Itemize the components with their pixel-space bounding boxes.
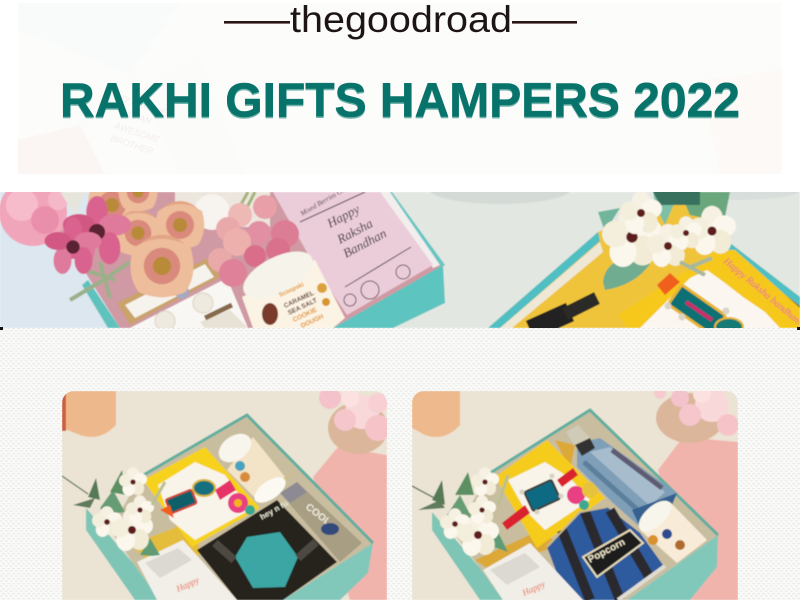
popcorn tin bbox=[547, 507, 665, 600]
title: RAKHI GIFTS HAMPERS 2022 bbox=[60, 74, 740, 128]
vase and pink flowers bbox=[654, 391, 738, 443]
gift box bbox=[412, 410, 718, 600]
faint card lettering: AWESOME bbox=[112, 120, 162, 145]
logo: thegoodroad: thegoodroad bbox=[290, 0, 512, 40]
jar bbox=[218, 433, 286, 504]
cool tube: COOL bbox=[303, 502, 333, 528]
flowers bbox=[0, 192, 205, 302]
jar: cookie dough: Scoopski bbox=[278, 282, 305, 299]
chocolate bar bbox=[483, 543, 583, 600]
vase and pink flowers bbox=[318, 391, 387, 454]
cool tube bbox=[280, 482, 362, 562]
jar: cookie dough: CARAMEL bbox=[283, 290, 315, 310]
jar: cookie dough: DOUGH bbox=[300, 313, 325, 330]
tube: Happy Raksha Bandhan: Mixed Berries Chocolate bbox=[298, 176, 364, 218]
hydrangea bbox=[208, 192, 299, 287]
steel bottle bbox=[566, 425, 677, 527]
jar: cookie dough bbox=[242, 250, 346, 328]
cards and earrings bbox=[117, 257, 248, 331]
gift box bbox=[62, 415, 373, 600]
faint card lettering: HAS AN bbox=[118, 106, 153, 126]
faint card lettering: MY BROTHER bbox=[115, 92, 176, 120]
hero right: gift box bbox=[488, 190, 800, 336]
faint card lettering bbox=[103, 92, 176, 159]
chocolate bar: Happy bbox=[174, 575, 201, 594]
yellow rakhi card bbox=[143, 447, 260, 547]
jar bbox=[638, 500, 707, 564]
faint card lettering: BROTHER bbox=[109, 133, 155, 156]
textured lower panel bbox=[0, 327, 800, 600]
flowers bbox=[412, 467, 508, 556]
header panel bbox=[18, 3, 782, 174]
popcorn tin: Popcorn bbox=[586, 537, 627, 566]
jar: cookie dough: SEA SALT bbox=[287, 297, 318, 317]
tube: Happy Raksha Bandhan: Bandhan bbox=[340, 225, 389, 261]
flowers bbox=[62, 467, 165, 556]
rakhi bbox=[657, 273, 743, 336]
hero left: gift box bbox=[0, 192, 446, 328]
product photo 1 bbox=[62, 387, 391, 600]
candle bbox=[412, 391, 460, 437]
tube: Happy Raksha Bandhan: Raksha bbox=[333, 215, 376, 247]
hero photo strip bbox=[0, 192, 800, 328]
chocolate bar bbox=[137, 540, 237, 600]
candle bbox=[62, 391, 116, 437]
white flowers bbox=[598, 190, 736, 290]
black box with hexagon: hey n fun bbox=[258, 496, 294, 522]
black box with hexagon bbox=[197, 496, 337, 600]
tube: Happy Raksha Bandhan bbox=[273, 192, 433, 316]
jar: cookie dough: COOKIE bbox=[292, 306, 319, 324]
title: RAKHI GIFTS HAMPERS 2022 bbox=[60, 76, 740, 129]
product photo 2 bbox=[412, 385, 739, 600]
yellow rakhi card bbox=[495, 440, 605, 548]
tube: Happy Raksha Bandhan: Happy bbox=[323, 201, 362, 231]
chocolate bar: Happy bbox=[520, 579, 547, 598]
